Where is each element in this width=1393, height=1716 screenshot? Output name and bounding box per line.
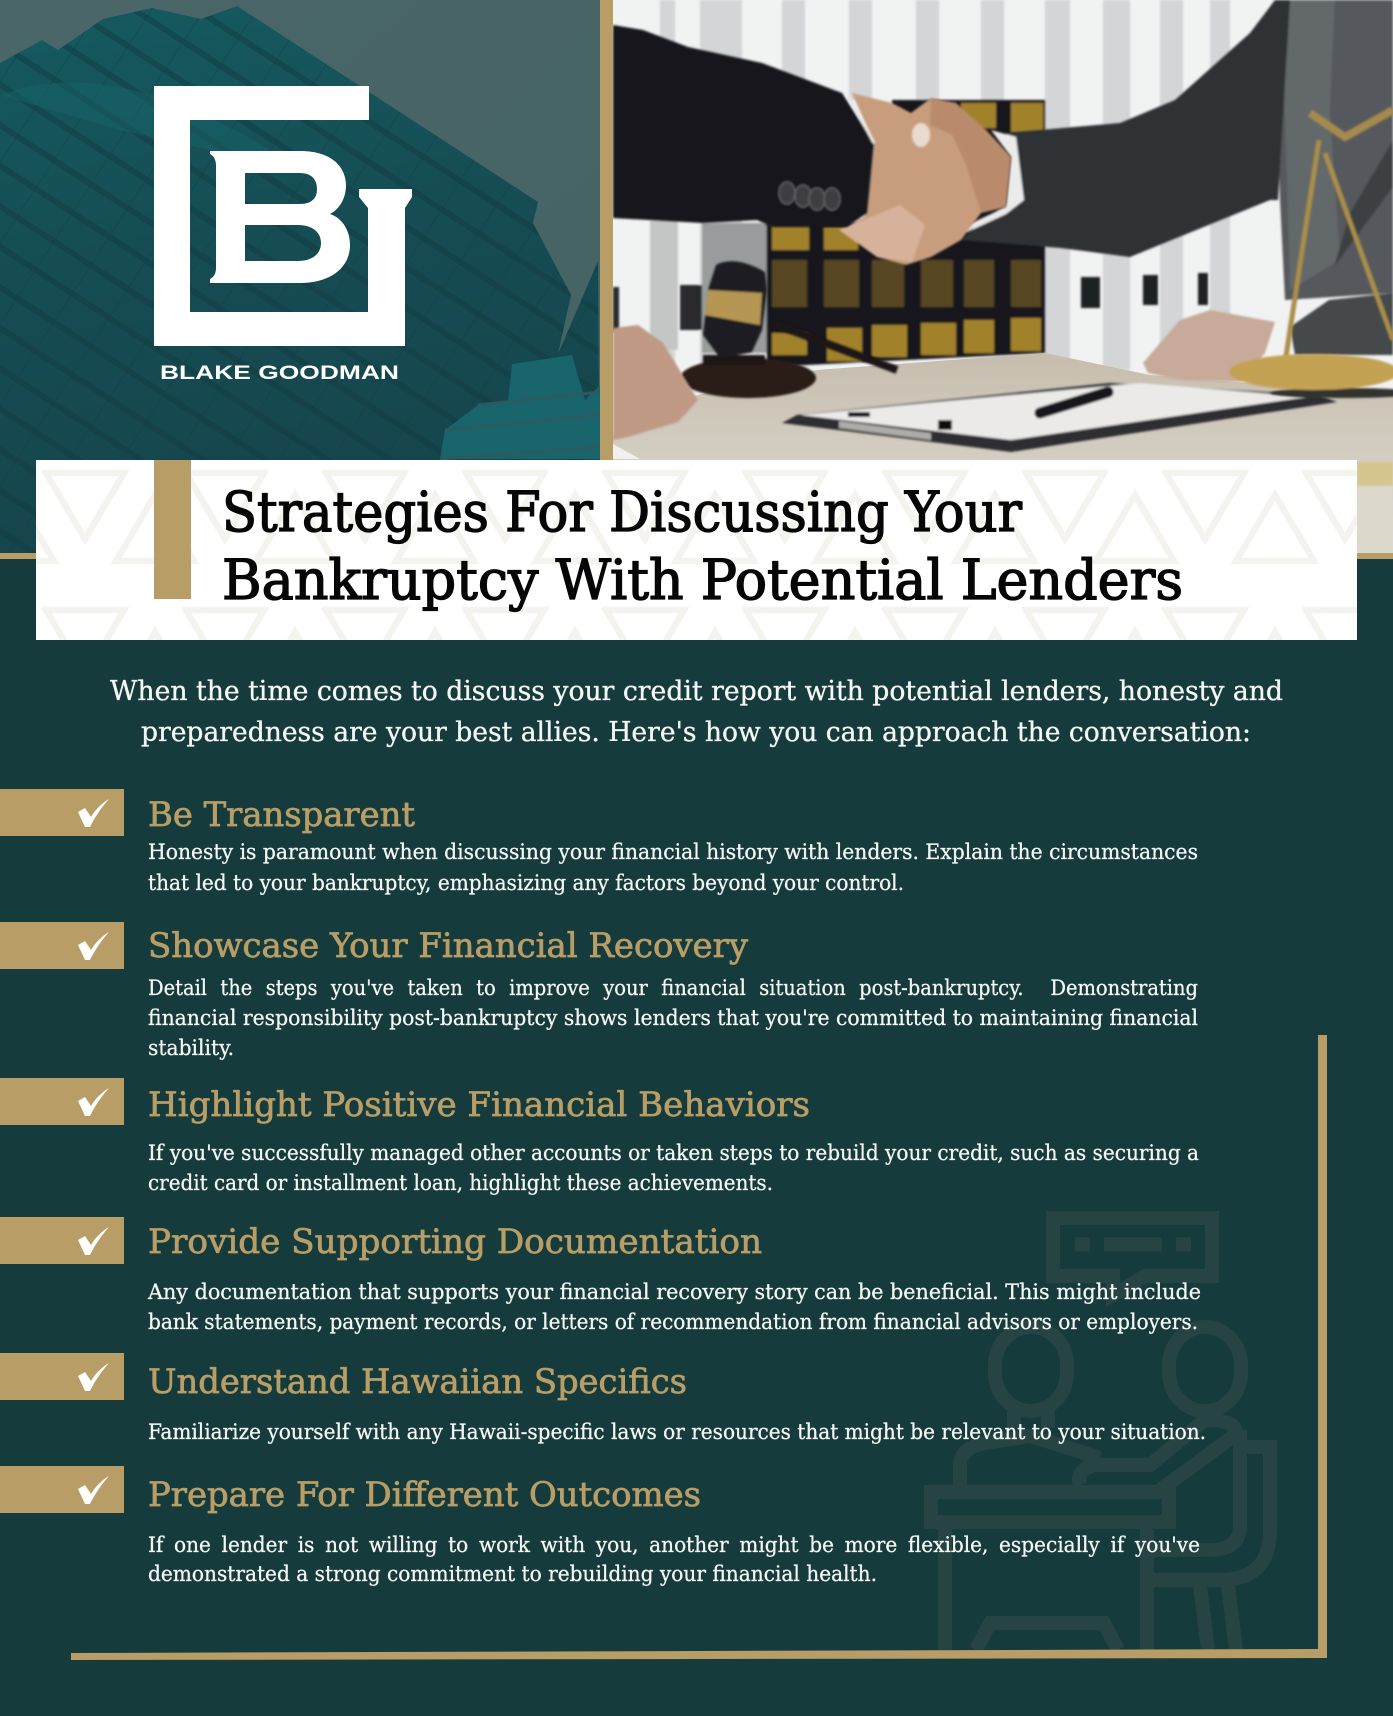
body text: If you've successfully managed other accounts or taken steps to rebuild your credit, such as securing a — [148, 1141, 1199, 1165]
item 6: Prepare For Different Outcomes — [0, 1466, 1200, 1586]
heading: Highlight Positive Financial Behaviors — [148, 1085, 810, 1124]
body text: credit card or installment loan, highlight these achievements. — [148, 1171, 773, 1195]
body text: bank statements, payment records, or letters of recommendation from financial advisors or employers. — [148, 1310, 1198, 1334]
body text — [148, 1141, 1199, 1195]
item 2: Showcase Your Financial Recovery — [0, 922, 1198, 1060]
gold scales — [1142, 106, 1393, 487]
body text — [147, 1280, 1201, 1334]
hands shaking — [839, 93, 1011, 265]
title — [222, 480, 1183, 612]
intro paragraph: When the time comes to discuss your credit report with potential lenders, honesty and — [110, 676, 1283, 707]
heading: Understand Hawaiian Specifics — [148, 1362, 687, 1401]
title accent bar — [154, 460, 191, 599]
title: Strategies For Discussing Your — [222, 480, 1022, 544]
desk — [613, 353, 1393, 553]
body text: that led to your bankruptcy, emphasizing any factors beyond your control. — [148, 871, 904, 895]
heading: Be Transparent — [148, 795, 415, 834]
left hand — [613, 325, 698, 440]
item 4: Provide Supporting Documentation — [0, 1217, 1201, 1334]
logo mark — [154, 86, 412, 346]
gavel — [680, 261, 897, 398]
check banner — [0, 1078, 124, 1125]
check banner — [0, 1217, 124, 1264]
background icon: two people at a desk — [931, 1218, 1270, 1650]
body text — [148, 840, 1198, 895]
item 3: Highlight Positive Financial Behaviors — [0, 1078, 1199, 1195]
body text: Detail the steps you've taken to improve your financial situation post-bankruptcy. Demonstrating — [148, 976, 1198, 1000]
check banner — [0, 789, 124, 836]
clipboard and pen — [782, 383, 1337, 452]
item 5: Understand Hawaiian Specifics — [0, 1353, 1206, 1444]
body text — [148, 976, 1198, 1060]
law books — [767, 100, 1045, 367]
check banner — [0, 922, 124, 969]
suit right — [961, 0, 1393, 355]
header photo: office building with logo — [0, 0, 600, 553]
logo: Blake Goodman — [154, 86, 412, 384]
body text: If one lender is not willing to work with you, another might be more flexible, especially if you've — [148, 1533, 1200, 1557]
title: Bankruptcy With Potential Lenders — [222, 548, 1183, 612]
body text — [148, 1533, 1200, 1586]
body text: Familiarize yourself with any Hawaii-specific laws or resources that might be relevant to your situation. — [148, 1420, 1206, 1444]
item 1: Be Transparent — [0, 789, 1198, 895]
intro paragraph — [110, 676, 1283, 748]
check banner — [0, 1353, 124, 1400]
title panel — [36, 460, 1357, 640]
body text: stability. — [148, 1036, 234, 1060]
body text: Any documentation that supports your financial recovery story can be beneficial. This might include — [147, 1280, 1201, 1304]
body text: demonstrated a strong commitment to rebuilding your financial health. — [148, 1562, 877, 1586]
heading: Provide Supporting Documentation — [148, 1222, 762, 1261]
body text: Honesty is paramount when discussing your financial history with lenders. Explain the circumstances — [148, 840, 1198, 864]
header photo: handshake at lawyer's desk — [613, 0, 1393, 553]
intro paragraph: preparedness are your best allies. Here's how you can approach the conversation: — [141, 717, 1251, 748]
check banner — [0, 1466, 124, 1513]
heading: Showcase Your Financial Recovery — [148, 926, 748, 965]
heading: Prepare For Different Outcomes — [148, 1475, 701, 1514]
gold frame — [71, 1035, 1327, 1660]
body text: financial responsibility post-bankruptcy shows lenders that you're committed to maintaining financial — [148, 1006, 1198, 1030]
logo wordmark: BLAKE GOODMAN — [160, 363, 399, 384]
gold horizontal band — [0, 553, 1393, 559]
gold vertical divider — [600, 0, 613, 460]
suit left — [613, 25, 874, 227]
